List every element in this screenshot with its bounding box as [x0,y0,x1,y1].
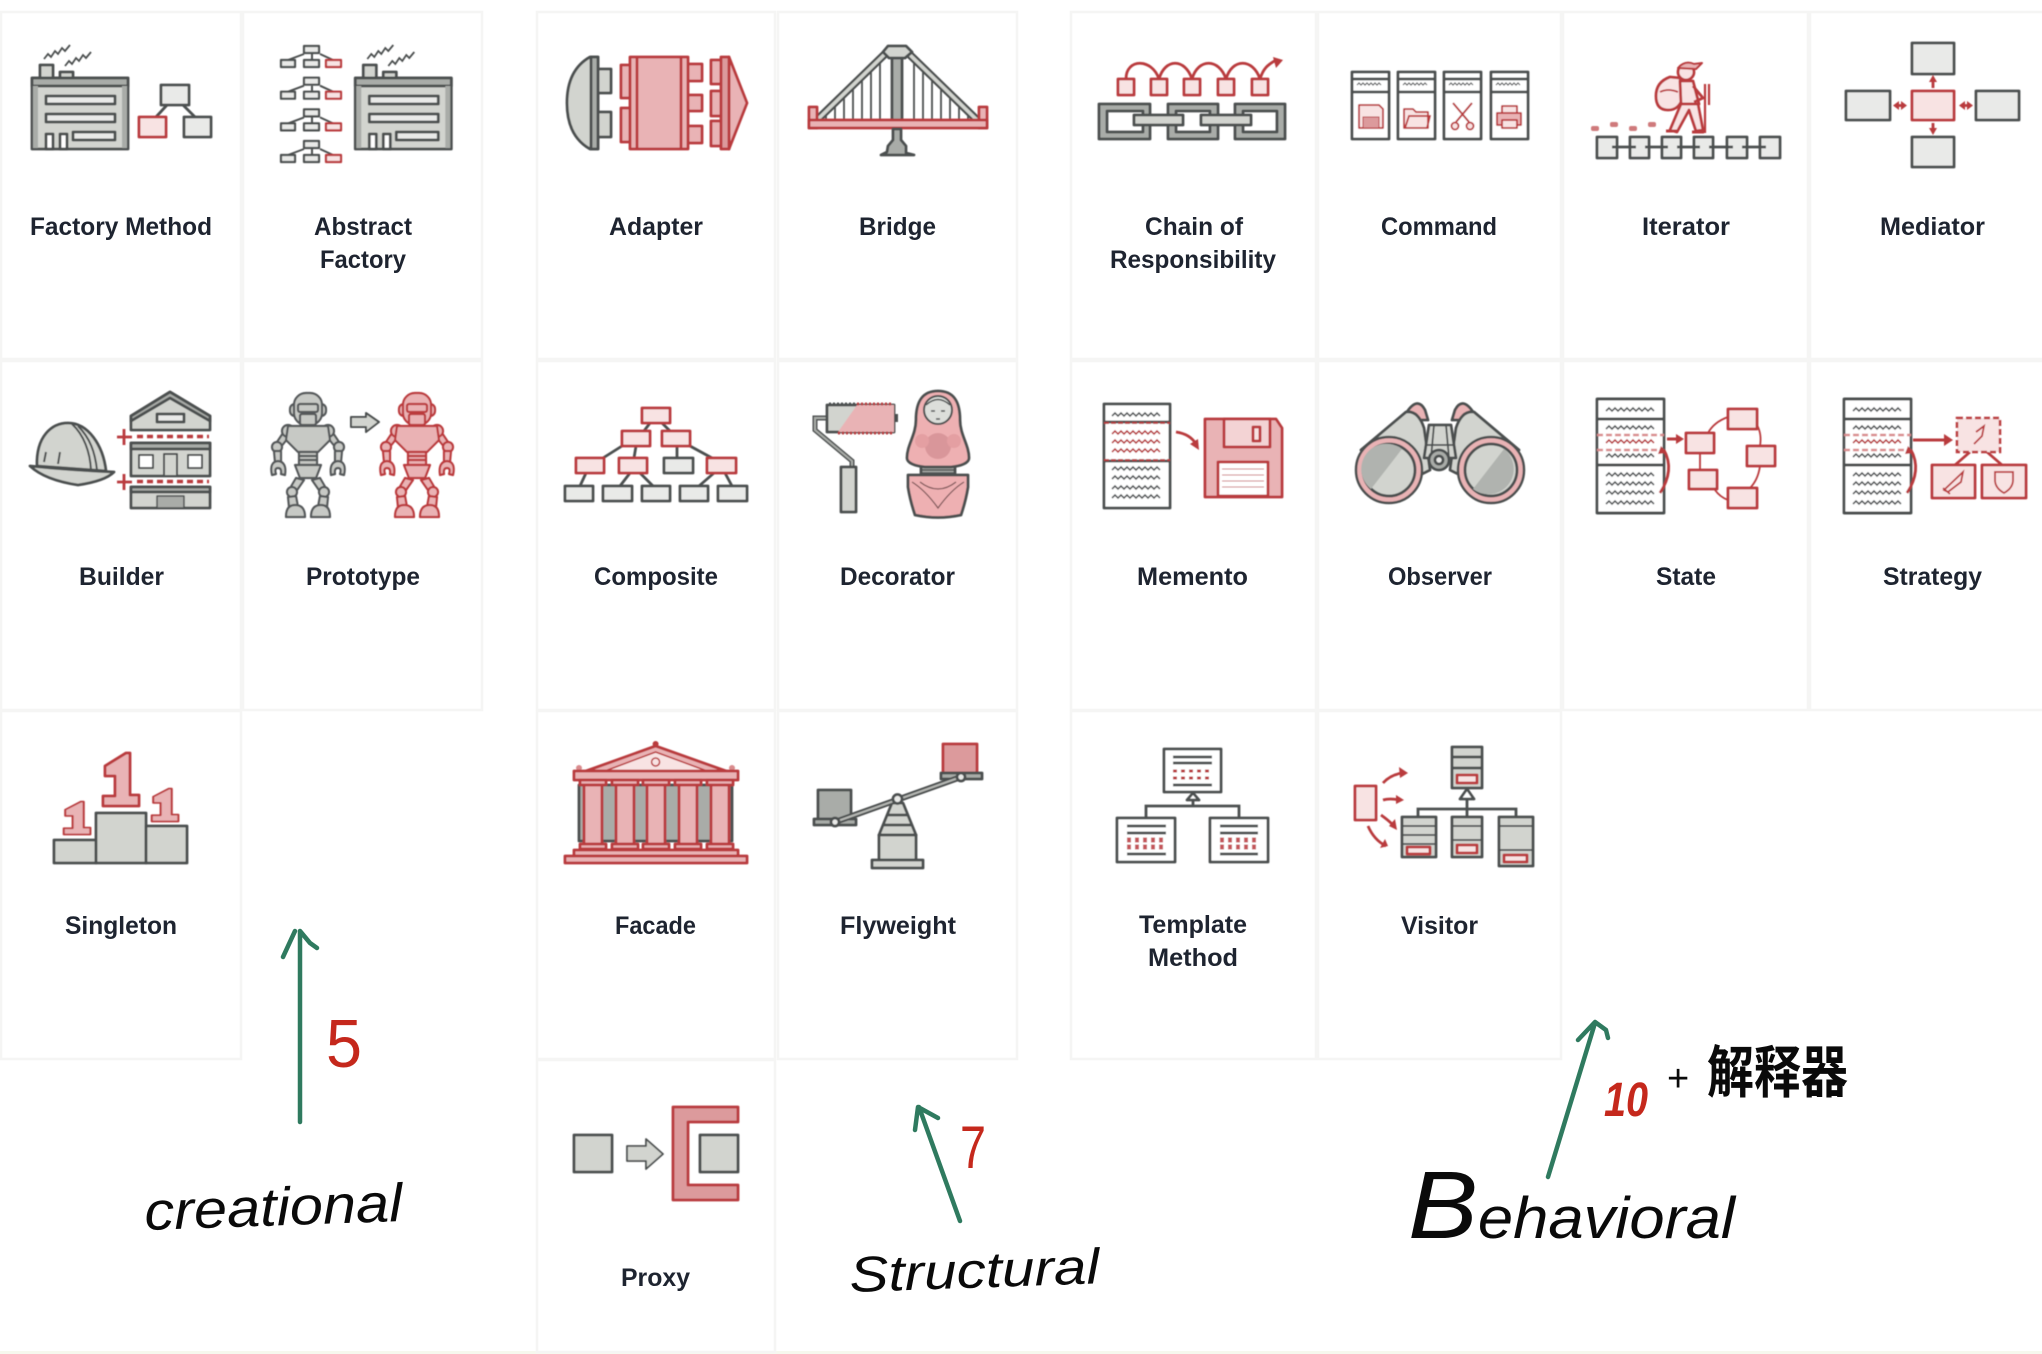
panel: Bridge [778,12,1017,359]
label: Factory Method [30,213,212,241]
label [314,213,413,274]
icon: binoculars [1356,404,1524,503]
icon: seesaw with boxes [814,744,982,868]
icon: composite tree [565,408,747,501]
icon: template hierarchy [1117,749,1268,862]
label: Command [1381,213,1497,241]
label: Responsibility [1110,246,1276,274]
label: Adapter [609,213,703,241]
label: Factory [320,246,406,274]
label: Builder [79,563,164,591]
panel: Chain of Responsibility [1071,12,1316,359]
label: Composite [594,563,718,591]
label: creational: creational [143,1173,405,1242]
label: Chain of [1145,213,1244,241]
label: State [1656,563,1716,591]
label [1110,213,1276,274]
label: Abstract [314,213,413,241]
label: Decorator [840,563,955,591]
panel: Abstract Factory [243,12,482,359]
label: Strategy [1883,563,1982,591]
panel: Iterator [1563,12,1808,359]
panel: Adapter [537,12,775,359]
icon: suspension bridge [809,46,987,155]
label: Template [1139,911,1247,939]
label: structural: Structural [848,1238,1102,1303]
label: Prototype [306,563,420,591]
arrow: structural [915,1107,960,1221]
annotation: structural [848,1107,1102,1303]
icon: chain links and hops [1099,57,1285,139]
panel: Composite [537,361,775,710]
panel: Command [1318,12,1561,359]
count: 7: 7 [960,1114,986,1181]
panel: Template Method [1071,711,1316,1059]
icon: document saved to floppy [1104,404,1282,508]
plus interpreter note: 解释器 [1707,1042,1848,1105]
label [1139,911,1247,972]
label: Bridge [859,213,936,241]
icon: document and state cycle [1597,399,1775,513]
icon: factory with four class trees [281,45,451,162]
panel: Facade [537,711,775,1059]
icon: classical temple [565,741,747,863]
icon: four command cards [1352,72,1528,139]
panel: Prototype [243,361,482,710]
panel: Proxy [537,1060,775,1352]
label: Proxy [621,1264,690,1292]
annotation: behavioral [1408,1022,1848,1259]
icon: mediator hub [1846,43,2019,167]
panel: Mediator [1810,12,2042,359]
icon: podium with ones [54,753,187,863]
icon: document and strategy choices [1844,399,2026,513]
arrow: creational [283,931,317,1122]
label: Flyweight [840,912,957,940]
icon: adapter plugs [567,57,747,149]
panel: Observer [1318,361,1561,710]
panel: Factory Method [1,12,241,359]
label: Facade [615,912,696,940]
panel: State [1563,361,1808,710]
plus interpreter note: + [1667,1058,1689,1100]
icon: paint roller and matryoshka [815,391,969,518]
icon: gray robot, arrow, red robot [271,393,454,517]
count: 5: 5 [326,1006,362,1082]
icon: hard hat and house [30,392,210,508]
label: Mediator [1880,213,1985,241]
label: Memento [1137,563,1248,591]
panel: Singleton [1,711,241,1059]
count: 10: 10 [1604,1074,1648,1127]
panel: Flyweight [778,711,1017,1059]
label: behavioral: Behavioral [1408,1152,1737,1259]
icon: hiker on chain [1591,63,1780,158]
bottom edge strip [0,1351,2042,1354]
panel: Decorator [778,361,1017,710]
panel: Strategy [1810,361,2042,710]
icon: visitor and class hierarchy [1355,747,1533,866]
label: Singleton [65,912,177,940]
arrow: behavioral [1548,1022,1608,1177]
label: Iterator [1642,213,1730,241]
panel: Builder [1,361,241,710]
annotation: creational [143,931,405,1242]
panel: Visitor [1318,711,1561,1059]
label: Method [1148,944,1238,972]
label: Visitor [1401,912,1478,940]
label: Observer [1388,563,1492,591]
icon: factory with class tree [32,45,211,149]
icon: proxy wrapper [574,1107,738,1200]
panel: Memento [1071,361,1316,710]
